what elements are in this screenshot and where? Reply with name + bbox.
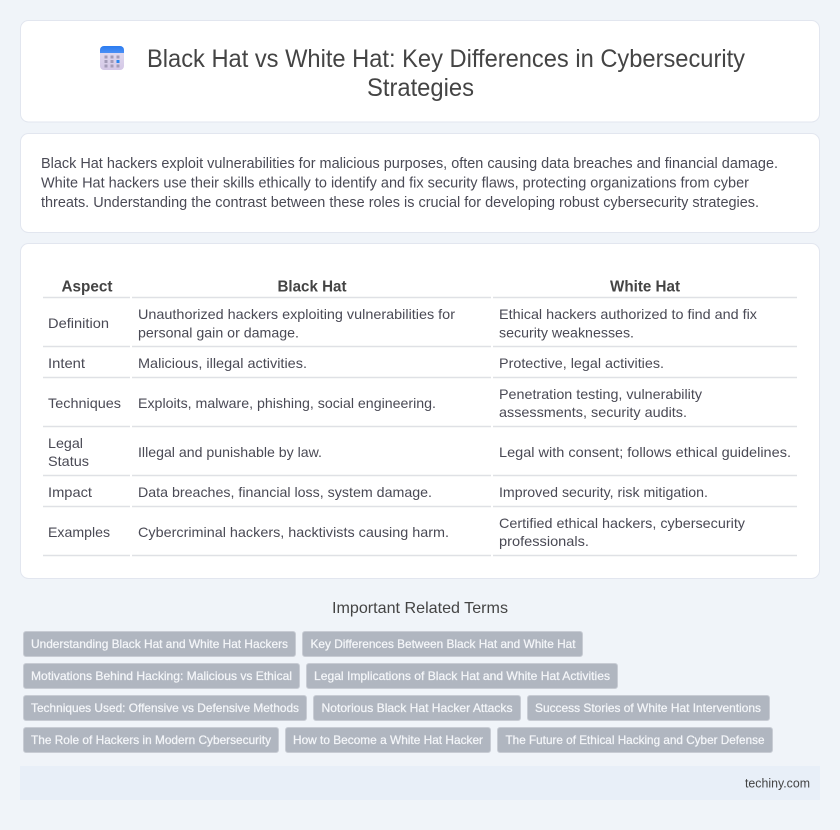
row: techniques xyxy=(43,386,797,426)
row: legal status: Illegal and punishable by law. xyxy=(138,444,322,460)
table header: Aspect xyxy=(62,278,113,296)
row: intent: Protective, legal activities. xyxy=(499,355,664,371)
tag: Motivations Behind Hacking: Malicious vs Ethical xyxy=(31,669,292,683)
heading: important related terms: Important Related Terms xyxy=(332,600,508,617)
row: examples xyxy=(43,515,797,556)
tag: The Future of Ethical Hacking and Cyber Defense xyxy=(506,733,765,747)
tag xyxy=(24,664,300,688)
row: examples: Certified ethical hackers, cybersecurity xyxy=(499,515,745,531)
row: legal status xyxy=(43,435,797,476)
text block: introduction xyxy=(41,156,778,211)
row: examples: professionals. xyxy=(499,533,589,549)
row: techniques: Techniques xyxy=(48,395,121,411)
tag xyxy=(528,696,770,720)
tag xyxy=(498,728,772,752)
row: techniques: assessments, security audits. xyxy=(499,404,687,420)
tag: Success Stories of White Hat Interventions xyxy=(535,701,761,715)
row: definition: security weaknesses. xyxy=(499,324,634,340)
tag: The Role of Hackers in Modern Cybersecurity xyxy=(31,733,271,747)
row: techniques: Exploits, malware, phishing, social engineering. xyxy=(138,395,436,411)
table header: Black Hat xyxy=(278,278,347,296)
row: impact: Improved security, risk mitigation. xyxy=(499,484,708,500)
row: definition xyxy=(43,306,797,346)
panel: header xyxy=(20,20,820,122)
table header: White Hat xyxy=(610,278,681,296)
tag: How to Become a White Hat Hacker xyxy=(293,733,483,747)
panel: related term tags xyxy=(24,632,772,752)
tag: Understanding Black Hat and White Hat Hackers xyxy=(31,637,288,651)
tag: Key Differences Between Black Hat and White Hat xyxy=(310,637,576,651)
tag xyxy=(24,696,306,720)
table header xyxy=(43,278,797,298)
row: impact: Data breaches, financial loss, system damage. xyxy=(138,484,432,500)
row: definition: Unauthorized hackers exploiting vulnerabilities for xyxy=(138,306,455,322)
row: techniques: Penetration testing, vulnerability xyxy=(499,386,702,402)
tag xyxy=(314,696,520,720)
panel: introduction xyxy=(20,134,820,232)
text block: introduction: threats. Understanding the contrast between these roles is crucial for developing robust cybersecurity strategies. xyxy=(41,195,759,211)
row: definition: Ethical hackers authorized to find and fix xyxy=(499,306,757,322)
row: intent: Malicious, illegal activities. xyxy=(138,355,307,371)
row: intent xyxy=(43,355,797,378)
title: Black Hat vs White Hat: Key Differences in Cybersecurity xyxy=(147,45,745,73)
row: legal status: Legal xyxy=(48,435,83,451)
row: definition: Definition xyxy=(48,315,109,331)
tag: Notorious Black Hat Hacker Attacks xyxy=(322,701,512,715)
tag xyxy=(286,728,490,752)
tag: Techniques Used: Offensive vs Defensive Methods xyxy=(31,701,299,715)
title: Strategies xyxy=(367,74,474,102)
title xyxy=(147,45,745,102)
row: impact: Impact xyxy=(48,484,92,500)
row: legal status: Status xyxy=(48,453,89,469)
footer: techiny.com xyxy=(745,776,810,790)
row: examples: Examples xyxy=(48,524,110,540)
tag xyxy=(24,632,296,656)
row: intent: Intent xyxy=(48,355,85,371)
row: definition: personal gain or damage. xyxy=(138,324,299,340)
text block: introduction: Black Hat hackers exploit vulnerabilities for malicious purposes, often causing data breaches and financial damage. xyxy=(41,156,778,172)
panel: comparison table xyxy=(20,244,820,578)
tag xyxy=(306,664,618,688)
footer xyxy=(20,766,820,800)
tag xyxy=(24,728,278,752)
icon: calendar xyxy=(100,46,124,70)
tag xyxy=(302,632,582,656)
row: examples: Cybercriminal hackers, hacktivists causing harm. xyxy=(138,524,449,540)
text block: introduction: White Hat hackers use their skills ethically to identify and fix security flaws, protecting organizations from cyber xyxy=(41,176,749,192)
tag: Legal Implications of Black Hat and White Hat Activities xyxy=(314,669,610,683)
row: impact xyxy=(43,484,797,506)
row: legal status: Legal with consent; follows ethical guidelines. xyxy=(499,444,791,460)
